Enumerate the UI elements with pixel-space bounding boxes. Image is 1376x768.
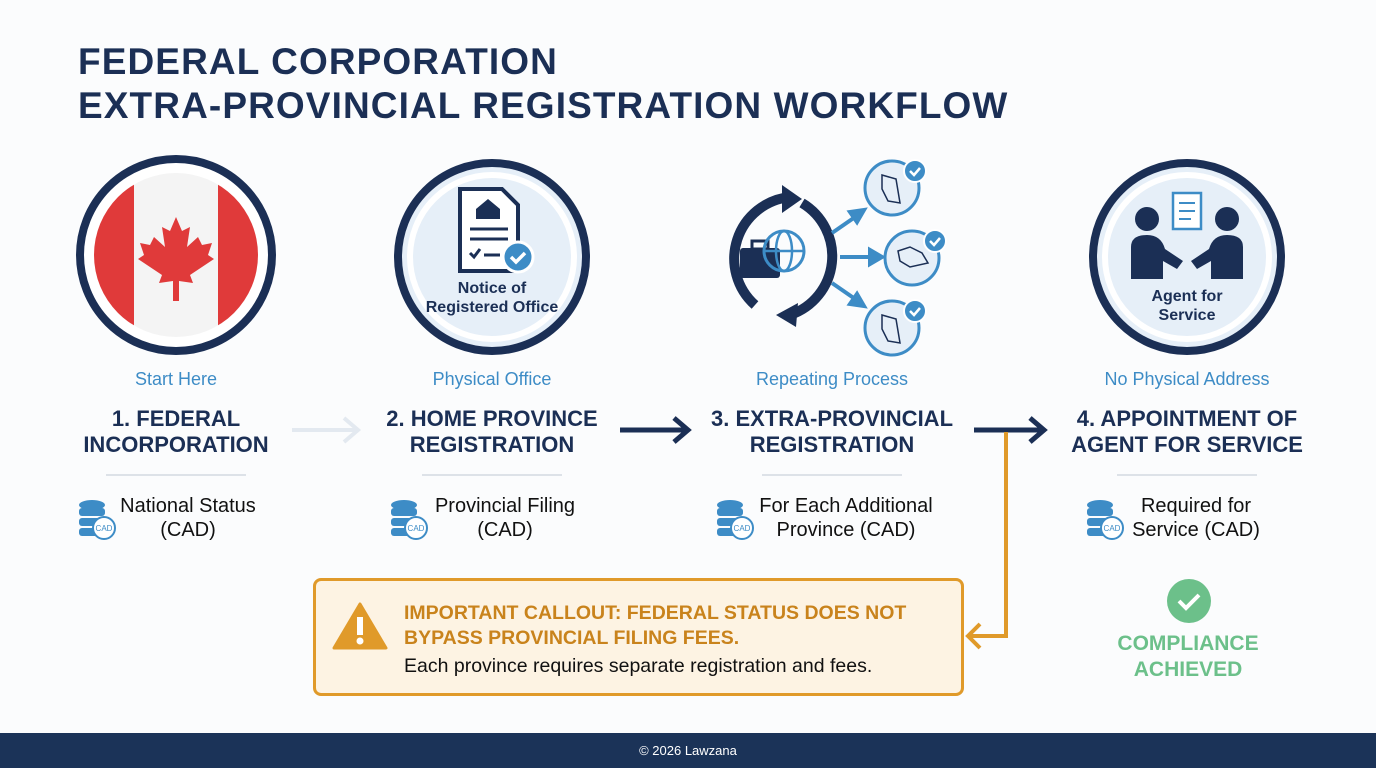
fee items: (CAD) — [160, 519, 216, 541]
text: 3. EXTRA-PROVINCIAL — [711, 406, 953, 431]
text: REGISTRATION — [750, 432, 914, 457]
text: CAD — [734, 524, 751, 533]
icon: notice of registered office circle: Notice of — [458, 280, 526, 297]
fee items: CAD — [96, 524, 113, 533]
fee items: National Status — [120, 495, 256, 517]
arrows between steps — [292, 416, 1048, 650]
icon: agent for service circle — [1089, 159, 1285, 355]
title: FEDERAL CORPORATION — [78, 41, 558, 82]
text: 2. HOME PROVINCE — [386, 406, 598, 431]
text: Service (CAD) — [1132, 519, 1260, 541]
step headings: 1. FEDERAL — [112, 406, 240, 431]
text: 4. APPOINTMENT OF — [1077, 406, 1297, 431]
text: CAD — [1104, 524, 1121, 533]
icon: warning — [332, 602, 388, 650]
icon: repeating process with provinces — [729, 160, 945, 356]
icon: notice of registered office circle — [394, 159, 590, 355]
compliance achieved — [1117, 579, 1259, 681]
callout — [313, 578, 964, 696]
icon: agent for service circle: Service — [1159, 307, 1215, 324]
footer: © 2026 Lawzana — [639, 743, 737, 758]
text: (CAD) — [477, 519, 533, 541]
text: Provincial Filing — [435, 495, 575, 517]
title: EXTRA-PROVINCIAL REGISTRATION WORKFLOW — [78, 85, 1008, 126]
compliance achieved: COMPLIANCE — [1117, 632, 1259, 655]
subtitle labels: Start Here — [135, 369, 217, 389]
step headings: INCORPORATION — [83, 432, 269, 457]
text: Physical Office — [433, 369, 551, 389]
callout: IMPORTANT CALLOUT: FEDERAL STATUS DOES NOT — [404, 602, 906, 624]
text: Province (CAD) — [777, 519, 915, 541]
callout: BYPASS PROVINCIAL FILING FEES. — [404, 627, 739, 649]
text: CAD — [408, 524, 425, 533]
text: AGENT FOR SERVICE — [1071, 432, 1303, 457]
step headings — [83, 406, 269, 457]
icon: canada flag circle — [76, 155, 276, 355]
footer — [0, 733, 1376, 768]
text: For Each Additional — [759, 495, 933, 517]
icon: agent for service circle: Agent for — [1151, 288, 1223, 305]
fee items — [79, 495, 256, 541]
text: REGISTRATION — [410, 432, 574, 457]
title — [78, 41, 1008, 126]
compliance achieved: ACHIEVED — [1134, 658, 1242, 681]
text: Required for — [1141, 495, 1251, 517]
text: No Physical Address — [1104, 369, 1270, 389]
callout: Each province requires separate registration and fees. — [404, 655, 872, 677]
icon: notice of registered office circle: Registered Office — [426, 299, 558, 316]
text: Repeating Process — [756, 369, 908, 389]
